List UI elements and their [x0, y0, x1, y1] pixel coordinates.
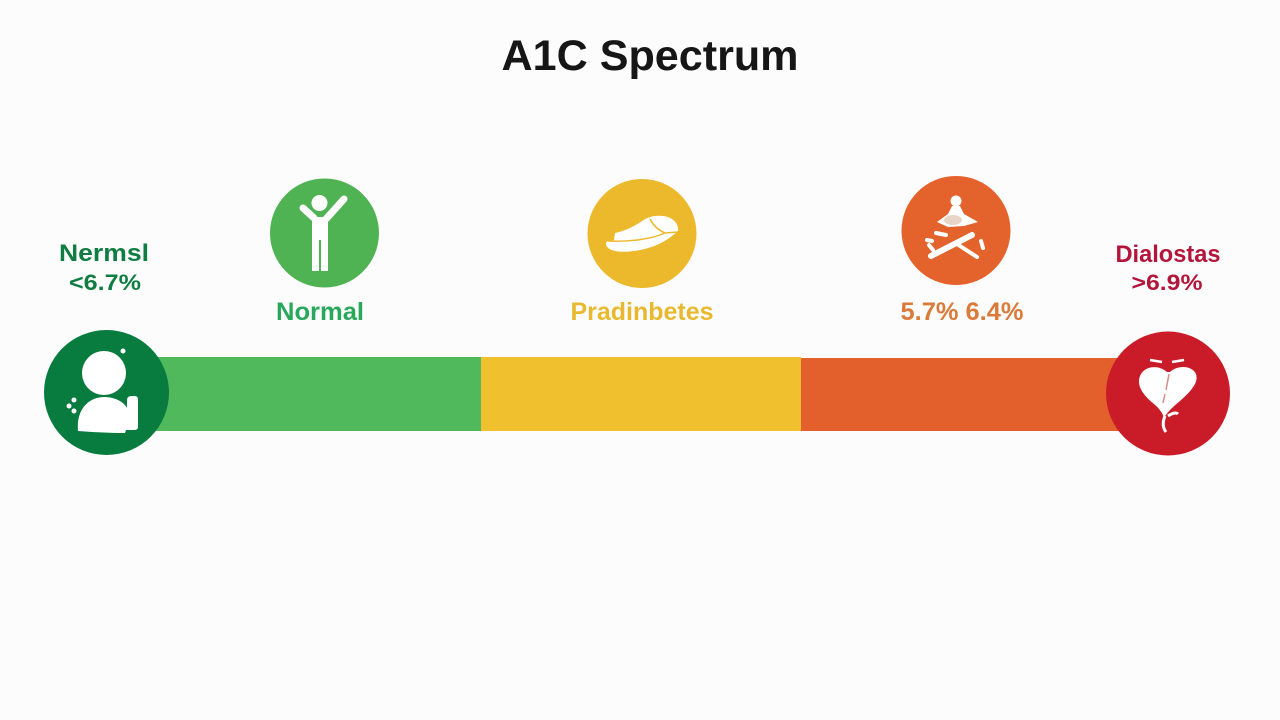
label: normal: Normal	[276, 298, 364, 326]
endpoint: diabetes broken heart icon	[1106, 332, 1230, 456]
endpoint: normal person icon	[44, 330, 169, 455]
icon: prediabetes, food shape	[588, 179, 696, 288]
icon: elevated, abstract figure	[902, 176, 1010, 285]
left label: normal range	[59, 240, 149, 295]
right label: diabetes range	[1116, 241, 1220, 295]
label: prediabetes: Pradinbetes	[570, 298, 714, 326]
left label: normal range: Nermsl	[59, 240, 149, 267]
left label: normal range: <6.7%	[69, 270, 141, 295]
icon: normal, person with raised arms	[270, 178, 379, 288]
segment: elevated	[801, 358, 1126, 431]
right label: diabetes range: Dialostas	[1116, 241, 1220, 268]
label: elevated range: 5.7% 6.4%	[900, 298, 1024, 326]
right label: diabetes range: >6.9%	[1132, 270, 1202, 295]
spectrum bar	[150, 357, 1126, 431]
title: A1C Spectrum	[502, 32, 798, 80]
segment: normal	[150, 357, 481, 431]
segment: prediabetes	[481, 357, 801, 431]
